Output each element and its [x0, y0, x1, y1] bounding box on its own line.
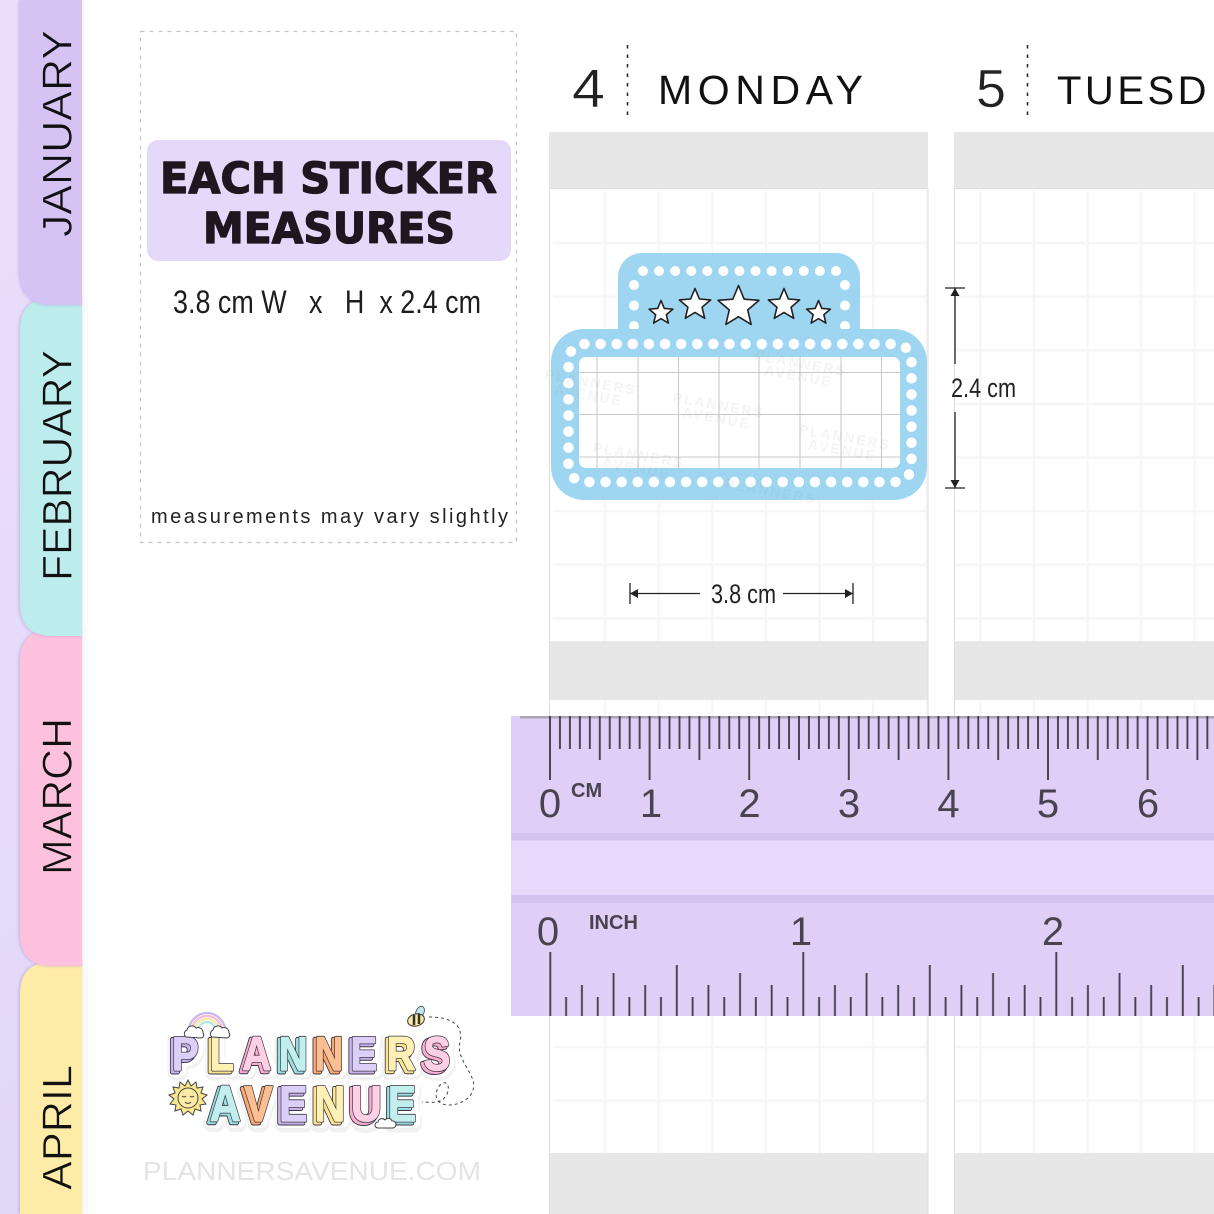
arrow: width 3.8 cm [630, 579, 853, 609]
logo word: Planners: PLANNERS [169, 1031, 448, 1083]
heading: day 5 Tuesday: 5 [976, 59, 1006, 119]
ruler inch labels: 2 [1042, 910, 1064, 954]
text: measurement note: measurements may vary slightly [151, 506, 508, 528]
sticker watermarks: AVENUE [807, 436, 878, 464]
icon: clouds [184, 1026, 396, 1128]
heading: day 5 Tuesday: TUESD [1057, 69, 1210, 113]
sticker watermarks: PLANNERS [672, 389, 766, 421]
logo word: Avenue: AVENUE [207, 1078, 414, 1134]
icon: bee [406, 1005, 426, 1028]
logo word: Avenue: AVENUE [210, 1076, 416, 1132]
ruler centimetre ticks [545, 716, 1214, 786]
ruler CM unit: CM [571, 780, 602, 802]
sticker watermarks: AVENUE [601, 454, 672, 482]
tab: March [20, 630, 82, 966]
heading: each sticker measures: EACH STICKER [160, 154, 497, 204]
tab: February: FEBRUARY [34, 350, 80, 581]
heading: each sticker measures: MEASURES [203, 204, 455, 254]
logo word: Planners: PLANNERS [172, 1029, 450, 1081]
logo word: Planners: PLANNERS [172, 1031, 450, 1083]
logo: Planners Avenue [169, 1005, 474, 1135]
ruler [511, 716, 1214, 1016]
sticker stars [649, 286, 830, 324]
ruler centimetre labels [539, 782, 1159, 826]
panel: side month tabs [0, 0, 88, 1214]
arrow: width 3.8 cm: 3.8 cm [711, 579, 776, 609]
ruler inch labels: 0 [537, 910, 559, 954]
text: dimensions: 3.8 cm W x H x 2.4 cm [173, 284, 481, 320]
logo word: Avenue: AVENUE [210, 1079, 416, 1135]
logo word: Avenue: AVENUE [210, 1076, 416, 1132]
sticker watermarks: AVENUE [681, 404, 752, 432]
logo word: Avenue: AVENUE [210, 1076, 416, 1132]
sticker watermarks: AVENUE [763, 362, 834, 390]
ruler inch ticks [545, 950, 1214, 1016]
ruler INCH unit: INCH [589, 912, 638, 934]
panel: planner column Monday [549, 132, 928, 1214]
panel: planner column Tuesday [954, 132, 1214, 1214]
tab: April: APRIL [34, 1065, 80, 1190]
heading: day 4 Monday: 4 [572, 59, 605, 119]
text: website: PLANNERSAVENUE.COM [143, 1156, 481, 1186]
tab: April [20, 962, 82, 1214]
ruler inch labels: 1 [790, 910, 812, 954]
panel: sticker measures box [140, 32, 516, 542]
sticker: blue star label [541, 253, 927, 507]
sticker watermarks: PLANNERS [544, 366, 638, 398]
ruler centimetre labels: 3 [838, 782, 860, 826]
logo word: Planners: PLANNERS [172, 1029, 450, 1081]
arrow: height 2.4 cm [945, 288, 1016, 488]
icon: rainbow [188, 1013, 226, 1034]
sticker watermarks: PLANNERS [724, 475, 818, 507]
heading: each sticker measures [147, 140, 511, 261]
tab: March: MARCH [34, 718, 80, 875]
logo word: Planners: PLANNERS [169, 1031, 448, 1083]
ruler inch labels [537, 910, 1064, 954]
ruler centimetre labels: 5 [1037, 782, 1059, 826]
sticker watermarks: PLANNERS [592, 439, 686, 471]
arrow: height 2.4 cm: 2.4 cm [951, 373, 1016, 403]
ruler centimetre labels: 1 [640, 782, 662, 826]
sticker body [551, 329, 927, 500]
heading: day 4 Monday: MONDAY [658, 67, 863, 113]
sticker watermarks: AVENUE [553, 381, 624, 409]
sticker tab [618, 253, 860, 353]
ruler centimetre labels: 6 [1137, 782, 1159, 826]
heading: day 5 Tuesday [976, 45, 1210, 119]
sticker watermarks [541, 347, 892, 507]
tab: January: JANUARY [34, 30, 80, 237]
sticker watermarks: PLANNERS [798, 421, 892, 453]
tab: February [20, 298, 82, 636]
icon: sun [169, 1080, 207, 1115]
logo word: Avenue: AVENUE [207, 1078, 414, 1134]
bee flight path [422, 1017, 474, 1105]
logo word: Planners: PLANNERS [172, 1029, 450, 1081]
ruler centimetre labels: 2 [738, 782, 761, 826]
heading: day 4 Monday [572, 45, 863, 119]
sticker watermarks: PLANNERS [754, 347, 848, 379]
ruler centimetre labels: 0 [539, 782, 561, 826]
tab: January [20, 0, 82, 305]
ruler centimetre labels: 4 [937, 782, 960, 826]
